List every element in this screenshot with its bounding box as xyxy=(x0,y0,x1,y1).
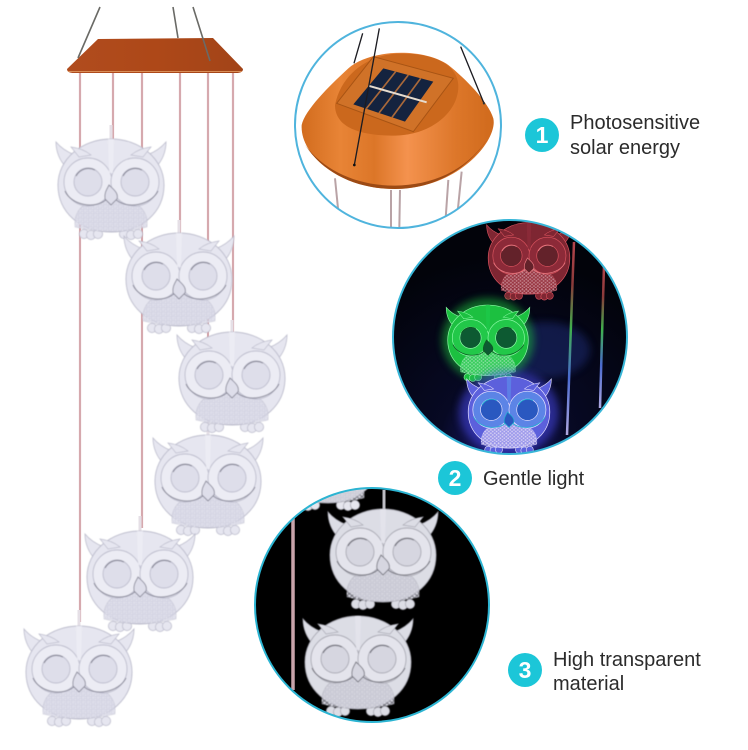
green owl xyxy=(446,305,530,381)
owl 1 xyxy=(56,139,166,240)
owl 4 xyxy=(153,435,263,536)
owl lower xyxy=(303,616,413,717)
lamp with solar panel xyxy=(302,28,494,189)
label: photosensitive solar energy: Photosensitive xyxy=(570,112,700,134)
badge 2 xyxy=(438,461,472,495)
partial owl at top xyxy=(304,489,368,512)
label: high transparent material: material xyxy=(553,673,624,695)
red owl xyxy=(487,223,571,300)
label: gentle light: Gentle light xyxy=(483,468,585,490)
owl upper xyxy=(328,509,438,610)
green glow xyxy=(442,298,534,382)
badge 3: 3 xyxy=(519,657,531,683)
owl 3 xyxy=(177,332,287,433)
badge 2: 2 xyxy=(449,465,461,491)
panel: coloured lights xyxy=(393,220,627,454)
wind chime product xyxy=(24,7,287,727)
blue owl xyxy=(467,377,551,454)
badge 3 xyxy=(508,653,542,687)
label: high transparent material: High transparent xyxy=(553,649,701,671)
strand in dark panel xyxy=(291,490,295,690)
blue haze xyxy=(500,322,590,378)
badge 1: 1 xyxy=(536,122,549,148)
owl 6 xyxy=(24,626,134,727)
owl 2 xyxy=(124,233,234,334)
light strands xyxy=(567,242,604,435)
hanging strings xyxy=(79,72,233,626)
owl 5 xyxy=(85,531,195,632)
strings below lamp xyxy=(335,172,462,228)
blue glow xyxy=(459,370,559,454)
panel: solar lamp close-up xyxy=(295,22,501,228)
badge 1 xyxy=(525,118,559,152)
panel: transparent material xyxy=(254,487,490,723)
label: photosensitive solar energy: solar energy xyxy=(570,137,680,159)
lamp top cone xyxy=(67,7,243,73)
